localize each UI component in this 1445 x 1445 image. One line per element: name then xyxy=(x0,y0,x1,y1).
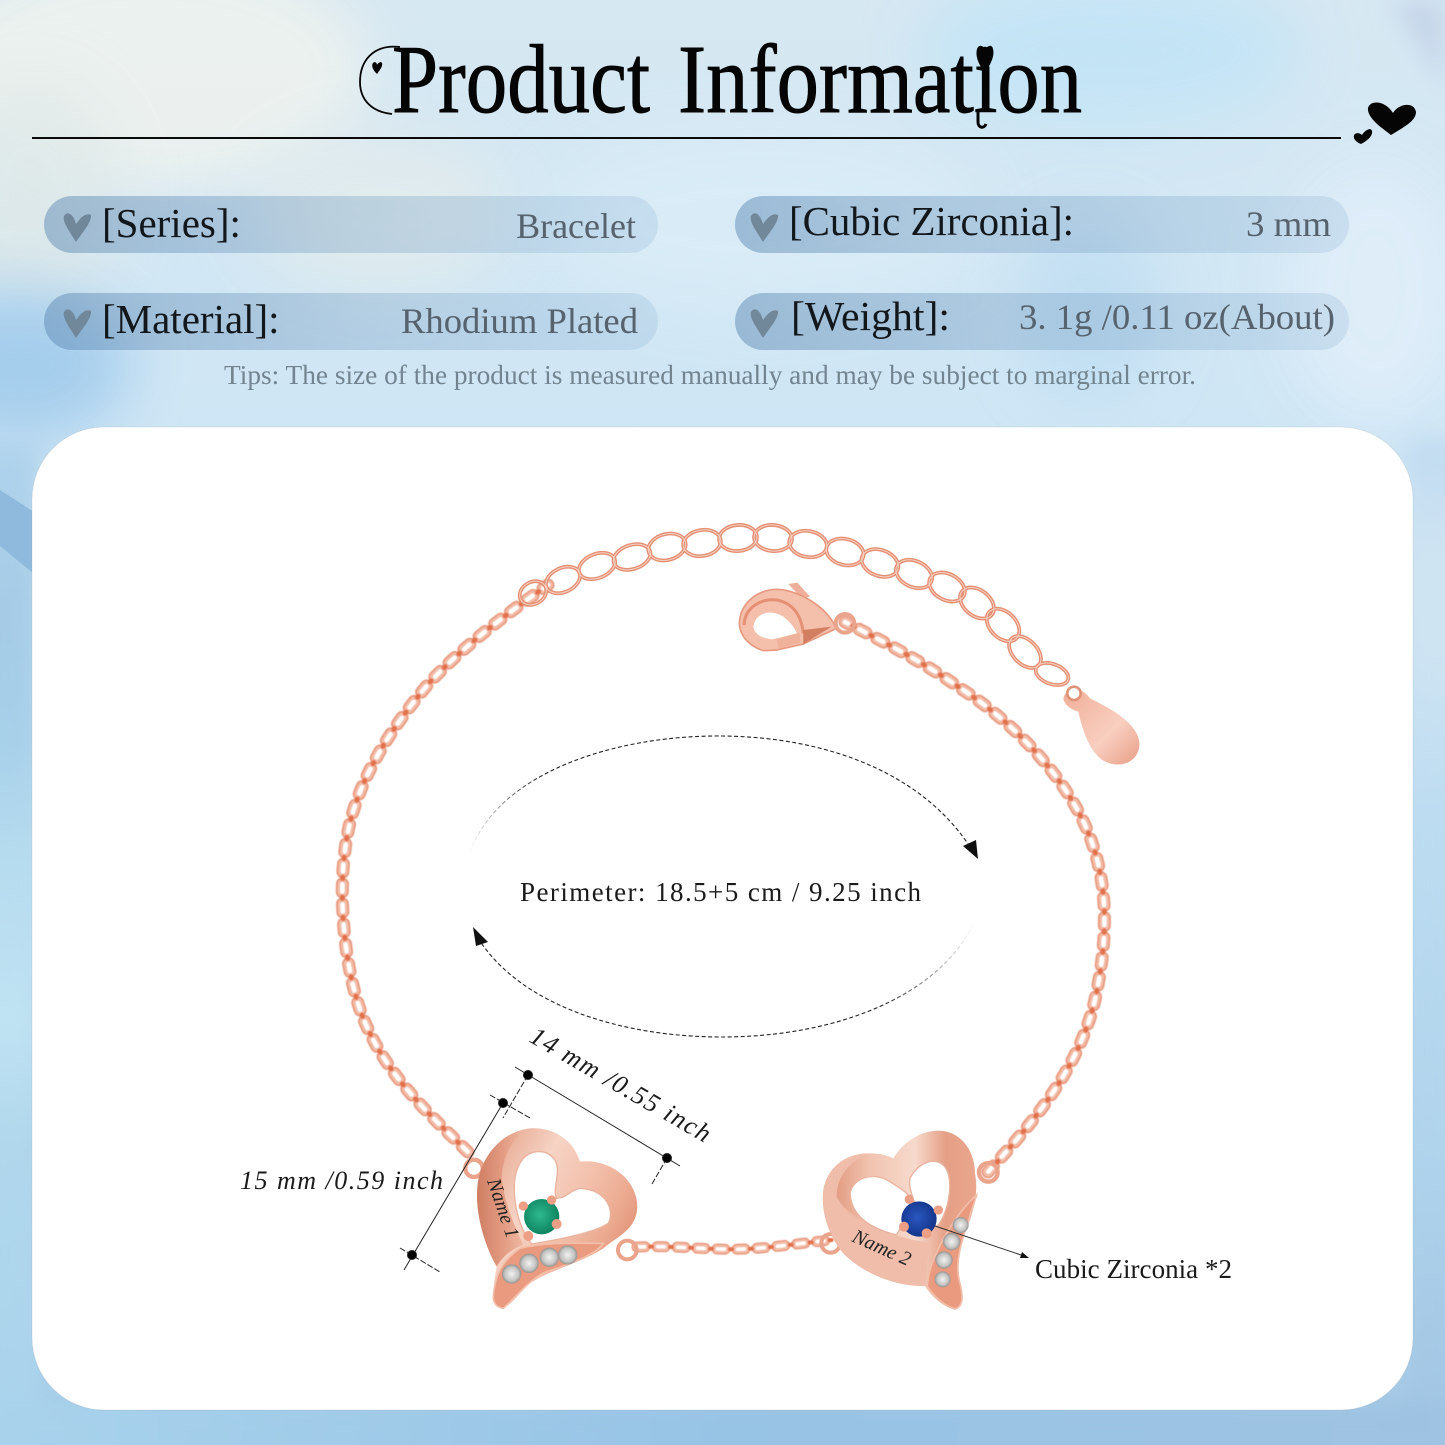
bracelet xyxy=(342,523,1139,1309)
link loops xyxy=(979,1163,998,1182)
tips note: Tips: The size of the product is measured manually and may be subject to marginal error. xyxy=(224,360,1196,390)
panel: cubic zirconia: 3 mm xyxy=(1246,204,1331,244)
dimension label: 15 mm: 15 mm /0.59 inch xyxy=(240,1166,443,1195)
callout leader: cubic zirconia xyxy=(935,1226,1029,1258)
icon: heart check xyxy=(64,213,91,242)
left heart pendant xyxy=(465,1128,637,1308)
panel: weight: 3. 1g /0.11 oz(About) xyxy=(1019,297,1335,337)
dimension: width xyxy=(503,1067,680,1184)
title xyxy=(360,26,1082,134)
icon: two black hearts xyxy=(1354,103,1416,144)
panel: series: [Series]: xyxy=(102,200,241,246)
icon: heart check xyxy=(64,309,91,338)
panel: material: [Material]: xyxy=(102,296,280,342)
panel: cubic zirconia: [Cubic Zirconia]: xyxy=(789,198,1074,244)
title: Product xyxy=(392,26,650,134)
extender chain xyxy=(515,523,1071,689)
icon: heart check xyxy=(751,213,778,242)
title: Information xyxy=(678,26,1082,134)
engraving: Name 1: Name 1 xyxy=(482,1175,523,1241)
panel: weight: [Weight]: xyxy=(791,293,950,339)
dimension label: 14 mm: 14 mm /0.55 inch xyxy=(525,1021,716,1148)
panel: series: Bracelet xyxy=(516,206,636,246)
perimeter label: Perimeter: 18.5+5 cm / 9.25 inch xyxy=(520,877,922,907)
teardrop tag xyxy=(1063,687,1139,764)
small link chain xyxy=(342,585,1104,1249)
panel: weight xyxy=(735,293,1349,350)
perimeter dashed arrows xyxy=(470,736,973,1037)
right heart pendant xyxy=(821,1131,998,1309)
gemstones xyxy=(953,1217,969,1233)
panel: series xyxy=(44,196,658,253)
callout label: Cubic Zirconia *2 xyxy=(1035,1254,1232,1284)
title rule xyxy=(32,137,1341,139)
panel: material: Rhodium Plated xyxy=(401,301,638,341)
dimension: height xyxy=(400,1095,530,1272)
panel: material xyxy=(44,293,658,350)
lobster clasp xyxy=(739,583,854,651)
arrowhead: upper xyxy=(963,840,978,859)
panel: cubic zirconia xyxy=(735,196,1349,253)
icon: heart check xyxy=(751,309,778,338)
link loops xyxy=(465,1160,483,1177)
gemstones xyxy=(502,1264,521,1284)
engraving: Name 2: Name 2 xyxy=(848,1225,914,1271)
arrowhead: lower xyxy=(473,927,488,946)
panel: white product card xyxy=(32,427,1413,1410)
